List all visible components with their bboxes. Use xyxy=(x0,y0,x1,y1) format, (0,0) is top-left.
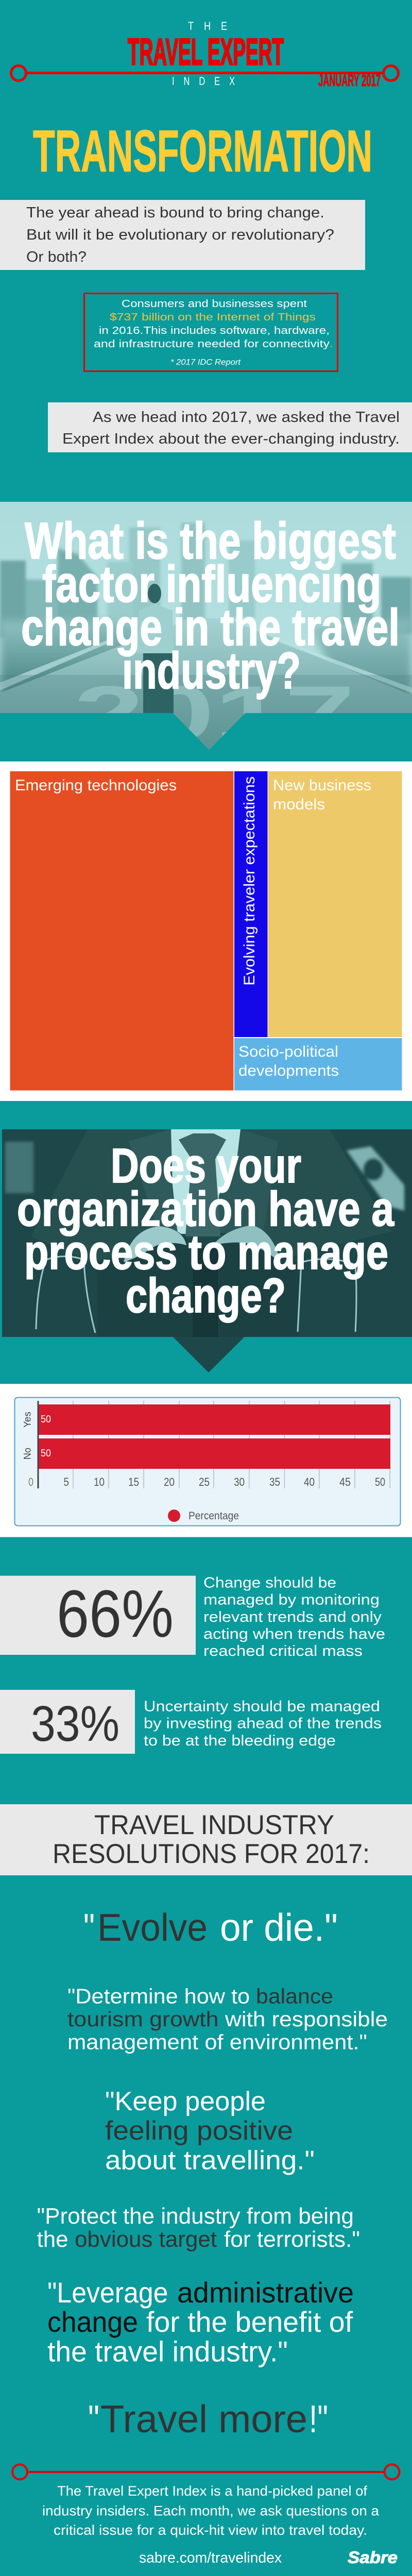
quote: administrative change: change xyxy=(47,2306,138,2338)
callout: IDC statistic xyxy=(84,294,338,371)
bar chart: 25 xyxy=(199,1476,210,1488)
lead-in text panel: Expert Index about the ever-changing industry. xyxy=(62,431,400,447)
quote: evolve or die xyxy=(83,1906,338,1949)
chart legend: Percentage xyxy=(188,1510,239,1522)
quote: administrative change: "Leverage xyxy=(47,2276,168,2309)
bar chart: 15 xyxy=(128,1476,139,1488)
quote: evolve or die: or die." xyxy=(220,1906,338,1949)
treemap: socio-political developments xyxy=(234,1038,402,1090)
panel: question 2 photo banner xyxy=(2,1129,412,1377)
bar chart: 50 xyxy=(375,1476,385,1488)
bar chart: 35 xyxy=(269,1476,280,1488)
bar chart: 45 xyxy=(339,1476,351,1488)
treemap: socio-political developments: Socio-political xyxy=(238,1043,338,1060)
stat: 33 percent: by investing ahead of the trends xyxy=(144,1716,382,1732)
bar chart: 30 xyxy=(234,1476,245,1488)
quote: obvious target: the xyxy=(37,2227,68,2252)
quote: administrative change: the travel industry." xyxy=(47,2335,288,2368)
quote: administrative change: for the benefit of xyxy=(146,2306,353,2338)
footer description xyxy=(42,2483,380,2538)
bar chart: 40 xyxy=(304,1476,315,1488)
panel: question 1 photo banner xyxy=(0,502,412,757)
quote: evolve or die: " xyxy=(83,1906,95,1949)
treemap: emerging technologies xyxy=(10,771,234,1090)
intro text panel: But will it be evolutionary or revolutionary? xyxy=(26,227,334,243)
photo: boxing gloves in suit xyxy=(2,1129,412,1377)
section heading: resolutions: TRAVEL INDUSTRY xyxy=(94,1810,334,1840)
heading: question 2: Does your xyxy=(111,1139,301,1193)
quote: feeling positive: about travelling." xyxy=(105,2145,315,2175)
bar chart: 10 xyxy=(94,1476,105,1488)
chart legend xyxy=(168,1510,239,1522)
chart frame xyxy=(14,1397,401,1526)
quote: balance tourism growth: "Determine how to xyxy=(67,1985,250,2008)
footer description: critical issue for a quick-hit view into travel today. xyxy=(54,2522,367,2538)
quote: balance tourism growth xyxy=(67,1985,388,2054)
lead-in text panel xyxy=(48,402,412,452)
callout: IDC statistic: $737 billion on the Internet of Things xyxy=(110,312,316,323)
footer description: industry insiders. Each month, we ask questions on a xyxy=(42,2503,380,2518)
section heading: resolutions xyxy=(0,1804,412,1875)
quote: obvious target: "Protect the industry from being xyxy=(37,2204,354,2229)
bar chart: 0 xyxy=(28,1476,33,1488)
quote: balance tourism growth: balance xyxy=(256,1985,333,2008)
stat: 33 percent: 33% xyxy=(31,1696,119,1752)
treemap: new business models: models xyxy=(273,796,325,813)
intro text panel: The year ahead is bound to bring change. xyxy=(26,205,324,221)
panel: treemap chart xyxy=(0,761,412,1101)
quote: administrative change xyxy=(47,2276,354,2368)
masthead: divider line with circles xyxy=(11,66,399,80)
quote: travel more: Travel more xyxy=(100,2397,307,2441)
heading: question 1: industry? xyxy=(122,642,301,700)
logo: Sabre: Sabre xyxy=(348,2548,398,2567)
stat: 66 percent: relevant trends and only xyxy=(203,1609,382,1625)
quote: administrative change: administrative xyxy=(177,2276,354,2309)
footer divider line with circles xyxy=(12,2465,400,2479)
quote: balance tourism growth: tourism growth xyxy=(67,2007,218,2031)
treemap: evolving traveler expectations xyxy=(234,771,268,1037)
stat: 66 percent: reached critical mass xyxy=(203,1643,363,1659)
stat: 33 percent: to be at the bleeding edge xyxy=(144,1733,336,1749)
bar chart: 50 xyxy=(41,1448,51,1459)
photo: man on road: 2017 xyxy=(74,670,355,756)
stat: 66 percent: 66% xyxy=(57,1576,174,1651)
bar chart: Yes xyxy=(23,1412,33,1428)
intro text panel: Or both? xyxy=(26,249,87,265)
heading: question 1 xyxy=(21,512,400,700)
callout: IDC statistic: * 2017 IDC Report xyxy=(170,358,241,367)
callout: IDC statistic: Consumers and businesses spent xyxy=(122,298,307,310)
quote: feeling positive xyxy=(105,2087,315,2175)
section heading: resolutions: RESOLUTIONS FOR 2017: xyxy=(53,1839,370,1869)
bar chart: 20 xyxy=(164,1476,175,1488)
quote: balance tourism growth: management of environment." xyxy=(67,2030,367,2054)
quote: obvious target: obvious target xyxy=(75,2227,217,2252)
stat: 66 percent: Change should be xyxy=(203,1574,336,1591)
bar chart xyxy=(23,1401,390,1488)
masthead: index: INDEX xyxy=(172,75,244,88)
intro text panel xyxy=(0,200,365,270)
footer url: sabre.com/travelindex xyxy=(139,2550,282,2566)
quote: feeling positive: "Keep people xyxy=(105,2087,266,2116)
quote: obvious target: for terrorists." xyxy=(224,2227,360,2252)
treemap: new business models xyxy=(268,771,402,1037)
header masthead xyxy=(11,20,399,90)
callout: IDC statistic: and infrastructure needed for connectivity xyxy=(94,338,330,350)
quote: obvious target xyxy=(37,2204,360,2252)
treemap: evolving traveler expectations: Evolving traveler expectations xyxy=(241,776,258,986)
bar chart: No xyxy=(23,1448,33,1460)
callout: IDC statistic: . xyxy=(330,338,333,350)
quote: evolve or die: Evolve xyxy=(97,1906,208,1949)
stat: 66 percent: acting when trends have xyxy=(203,1626,385,1642)
stat: 66 percent: managed by monitoring xyxy=(203,1592,380,1608)
bar chart: 50 xyxy=(41,1414,51,1425)
callout: IDC statistic: in 2016.This includes software, hardware, xyxy=(99,325,330,336)
quote: travel more: !" xyxy=(309,2397,328,2441)
quote: balance tourism growth: with responsible xyxy=(225,2007,388,2031)
heading: question 2: change? xyxy=(126,1268,286,1323)
heading: question 2 xyxy=(17,1139,394,1323)
treemap: socio-political developments: developments xyxy=(238,1062,339,1079)
footer description: The Travel Expert Index is a hand-picked panel of xyxy=(57,2483,368,2499)
treemap: new business models: New business xyxy=(273,777,371,794)
stat: 33 percent xyxy=(0,1690,382,1754)
lead-in text panel: As we head into 2017, we asked the Travel xyxy=(93,409,400,426)
panel: bar chart section xyxy=(0,1384,412,1537)
stat: 66 percent xyxy=(0,1574,385,1659)
quote: travel more: " xyxy=(88,2397,99,2441)
quote: feeling positive: feeling positive xyxy=(105,2116,293,2146)
treemap: emerging technologies: Emerging technologies xyxy=(15,777,177,794)
masthead: the: THE xyxy=(188,20,237,32)
photo: man on road xyxy=(0,502,412,757)
bar chart: 5 xyxy=(64,1476,69,1488)
stat: 33 percent: Uncertainty should be managed xyxy=(144,1698,380,1715)
